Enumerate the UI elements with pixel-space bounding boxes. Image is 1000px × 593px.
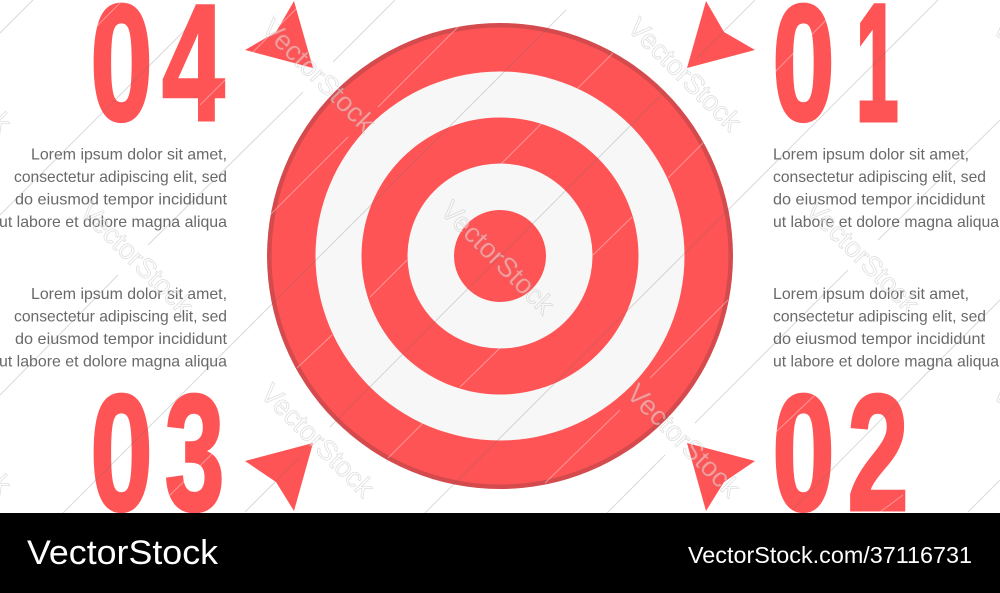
target: concentric circles — [267, 23, 733, 489]
number 02: 0 — [772, 361, 835, 546]
text block: upper left: Lorem ipsum dolor sit amet, — [31, 146, 227, 164]
text block: lower left: Lorem ipsum dolor sit amet, — [31, 286, 227, 303]
watermark: repeated VectorStock stamps: VectorStock — [800, 193, 926, 319]
footer logo text: VectorStock — [27, 534, 219, 572]
number 04 — [90, 0, 225, 156]
arrow: top right — [687, 1, 755, 68]
footer image id: VectorStock.com/37116731 — [688, 542, 972, 568]
text block: lower left: ut labore et dolore magna aliqua — [0, 354, 227, 370]
watermark: repeated VectorStock stamps: VectorStock — [621, 377, 747, 503]
text block: lower right: consectetur adipiscing elit, sed — [773, 308, 986, 326]
watermark: repeated VectorStock stamps: VectorStock — [74, 195, 200, 321]
number 03: 3 — [165, 359, 225, 546]
text block: upper left: do eiusmod tempor incididunt — [15, 192, 228, 208]
watermark: repeated VectorStock stamps: VectorStock — [255, 377, 381, 503]
number 02: 2 — [847, 359, 909, 545]
text block: upper right: consectetur adipiscing elit, sed — [773, 169, 986, 186]
text block: lower left — [0, 286, 228, 370]
text block: lower right: Lorem ipsum dolor sit amet, — [773, 286, 969, 303]
number 03 — [90, 359, 225, 546]
number 01 — [772, 0, 898, 156]
text block: upper right: ut labore et dolore magna aliqua — [773, 214, 999, 231]
text block: upper left — [0, 146, 228, 231]
watermark: repeated VectorStock stamps: VectorStock — [622, 11, 748, 137]
number 02 — [772, 359, 909, 546]
text block: lower right: do eiusmod tempor incididunt — [773, 331, 986, 348]
text block: upper right: do eiusmod tempor incididunt — [773, 192, 986, 208]
text block: upper left: ut labore et dolore magna aliqua — [0, 214, 227, 231]
text block: lower left: do eiusmod tempor incididunt — [15, 331, 228, 348]
arrow: bottom right — [687, 443, 755, 511]
watermark: repeated VectorStock stamps: VectorStock — [435, 194, 561, 320]
text block: upper left: consectetur adipiscing elit, sed — [14, 169, 227, 186]
text block: upper right — [773, 146, 999, 231]
arrow: top left — [245, 1, 313, 68]
text block: upper right: Lorem ipsum dolor sit amet, — [773, 146, 969, 164]
footer band — [0, 513, 1000, 593]
text block: lower right — [773, 286, 999, 370]
text block: lower right: ut labore et dolore magna aliqua — [773, 354, 999, 370]
watermark: repeated VectorStock stamps: VectorStock — [256, 12, 382, 138]
number 03: 0 — [90, 361, 153, 546]
text block: lower left: consectetur adipiscing elit, sed — [14, 308, 227, 326]
arrow: bottom left — [245, 443, 313, 511]
